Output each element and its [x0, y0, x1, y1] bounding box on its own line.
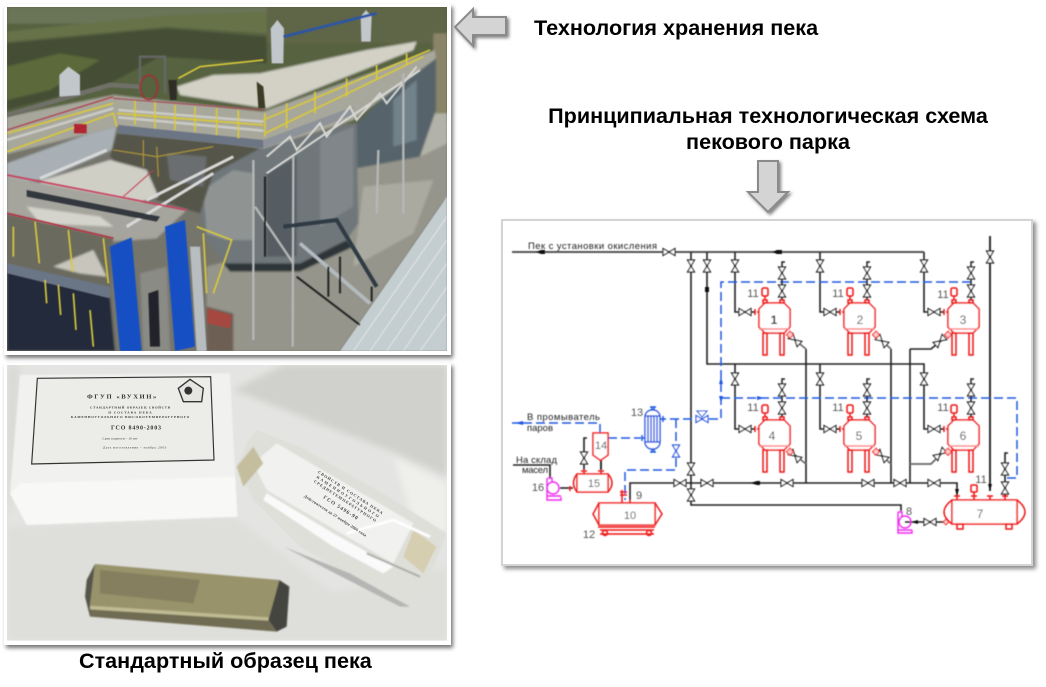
tank 15: 15 — [588, 478, 600, 490]
heat exchanger 13 — [631, 407, 663, 452]
pump 8 — [898, 506, 912, 533]
text: to the scrubber, vapours — [527, 412, 600, 434]
panel: photo frame of standard sample — [4, 363, 451, 645]
text: pitch from oxidation unit: Пек с установки окисления — [528, 241, 657, 252]
tank 10 on rail platform 12: 12 — [583, 529, 595, 541]
tank 3 — [928, 262, 979, 355]
text: label on the package: ГСО 8490-2003 — [111, 426, 161, 432]
tank 7, horizontal receiver — [944, 474, 1025, 529]
text: label on the bag: Действителен до 27 ноября 2006 года — [303, 493, 368, 538]
heading: standard sample caption: Стандартный образец пека — [79, 648, 372, 673]
photo: standard pitch samples — [7, 365, 447, 640]
text: label on the package: И СОСТАВА ПЕКА — [108, 410, 152, 414]
tank 3: 3 — [960, 313, 967, 327]
tank 15 — [570, 471, 612, 492]
valves on the black pipelines — [580, 251, 1008, 526]
text: to the oil warehouse: масел — [522, 465, 548, 476]
tank 7, horizontal receiver: 11 — [975, 474, 987, 486]
tank 7, horizontal receiver: 7 — [977, 507, 984, 521]
panel: photo frame of pitch storage — [4, 4, 451, 355]
tank 6: 6 — [960, 429, 967, 443]
pump 16: 16 — [532, 482, 544, 494]
text: label on the package — [71, 394, 190, 450]
text: label on the package: КАМЕННОУГОЛЬНОГО ВЫСОКОТЕМПЕРАТУРНОГО — [71, 415, 190, 419]
tank 10 on rail platform 12: 9 — [636, 490, 642, 502]
blue dashed steam lines — [512, 282, 1017, 500]
tank 5: 5 — [856, 429, 863, 443]
heading: process flow diagram title: Принципиальная технологическая схема — [548, 103, 988, 128]
heading: process flow diagram title — [548, 103, 988, 154]
text: label on the package: Дата изготовления – ноябрь 2003 — [103, 446, 167, 450]
text: label on the bag: СРЕДНЕТЕМПЕРАТУРНОГО — [313, 479, 377, 523]
text: label on the package: Срок годности – 10 лет — [102, 436, 138, 440]
tank 5: 11 — [832, 402, 844, 414]
text: to the oil warehouse — [516, 455, 557, 476]
photo: pitch storage tank farm — [7, 7, 447, 351]
heading: process flow diagram title: пекового парка — [686, 129, 850, 154]
text: label on the package: СТАНДАРТНЫЙ ОБРАЗЕЦ СВОЙСТВ — [90, 405, 171, 410]
tank 6: 11 — [937, 402, 949, 414]
tank 4 — [739, 379, 790, 472]
text: label on the bag — [302, 469, 384, 539]
tank 2 — [824, 262, 875, 355]
tank 3: 11 — [937, 289, 949, 301]
arrow: pointing down to the diagram — [746, 160, 794, 217]
text: to the scrubber, vapours: В промыватель — [527, 412, 600, 423]
tank 2: 11 — [832, 288, 844, 300]
tank 10 on rail platform 12 — [583, 490, 662, 541]
tank 1: 1 — [771, 313, 778, 327]
tank 1: 11 — [747, 288, 759, 300]
text: label on the package: ФГУП «ВУХИН» — [87, 394, 156, 401]
text: to the oil warehouse: На склад — [516, 455, 557, 466]
arrow: pointing left to the storage photo — [454, 6, 512, 52]
panel: process flow diagram — [501, 219, 1033, 566]
text: label on the bag: СВОЙСТВ И СОСТАВА ПЕКА — [317, 469, 384, 515]
tank 4: 11 — [747, 402, 759, 414]
tank 2: 2 — [857, 313, 864, 327]
tank 4: 4 — [769, 429, 776, 443]
tank 6 — [928, 379, 979, 472]
tank 5 — [824, 379, 875, 472]
blue valves and flow arrows — [515, 377, 764, 457]
vertical and horizontal black pipelines — [513, 236, 1008, 522]
text: label on the bag: ГСО 5496-90 — [322, 495, 359, 522]
vessel 14 — [593, 433, 608, 460]
pump 8: 8 — [906, 506, 912, 518]
vessel 14: 14 — [595, 440, 607, 452]
heat exchanger 13: 13 — [631, 407, 643, 419]
pump 16 — [532, 478, 561, 500]
text: to the scrubber, vapours: паров — [527, 423, 553, 434]
heading: pitch storage technology: Технология хранения пека — [534, 15, 818, 40]
tank 10 on rail platform 12: 10 — [624, 510, 636, 522]
main pitch feed line from oxidation unit — [512, 248, 924, 256]
text: label on the bag: КАМЕННОУГОЛЬНОГО — [316, 474, 380, 519]
drain nozzles of the tanks — [786, 331, 952, 525]
tank 1 — [739, 262, 790, 355]
